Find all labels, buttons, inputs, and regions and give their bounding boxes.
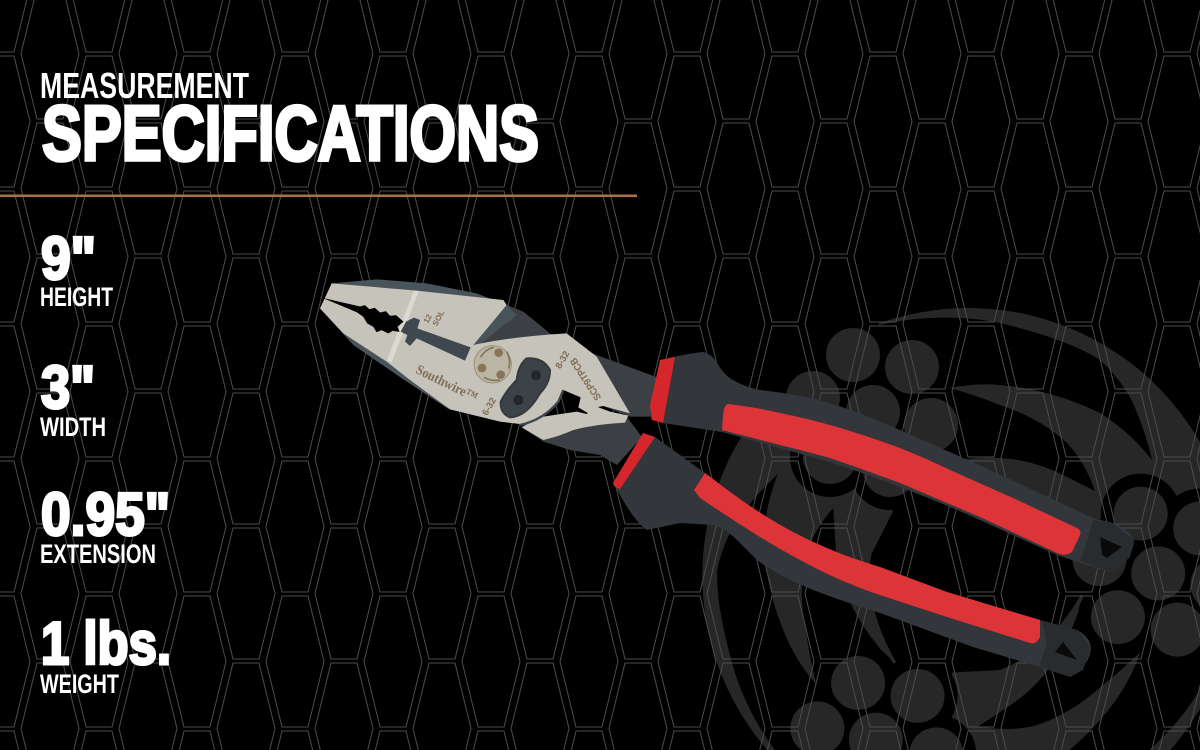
divider line	[0, 194, 637, 197]
upper handle	[650, 352, 1134, 573]
spec: height: 9"	[41, 225, 96, 292]
spec: extension: 0.95"	[41, 481, 170, 548]
lower handle	[613, 433, 1091, 677]
pliers handles	[613, 352, 1134, 677]
spec: extension	[40, 481, 170, 569]
engraved text: SOL	[431, 309, 446, 328]
engraved text: 8-32	[553, 349, 571, 370]
engraved text: Southwire™	[413, 363, 480, 405]
spec: width: 3"	[41, 354, 95, 421]
engraved text	[413, 309, 604, 417]
spec: weight	[40, 610, 171, 699]
watermark logo	[610, 308, 1200, 750]
spec: weight: WEIGHT	[40, 669, 119, 699]
pliers head	[320, 279, 660, 465]
engraved text: 6-32	[480, 396, 498, 417]
engraved text: SCP9TPCB	[568, 355, 604, 402]
spec: extension: EXTENSION	[40, 539, 156, 569]
engraved circular logo	[474, 346, 511, 383]
spec: height: HEIGHT	[40, 282, 113, 312]
spec: height	[40, 225, 113, 312]
pliers	[320, 279, 1134, 677]
title: SPECIFICATIONS	[42, 89, 539, 177]
title	[40, 65, 539, 177]
spec: width: WIDTH	[40, 412, 106, 442]
engraved text: 12	[422, 312, 434, 325]
spec: weight: 1 lbs.	[41, 610, 171, 677]
title: MEASUREMENT	[40, 65, 249, 106]
